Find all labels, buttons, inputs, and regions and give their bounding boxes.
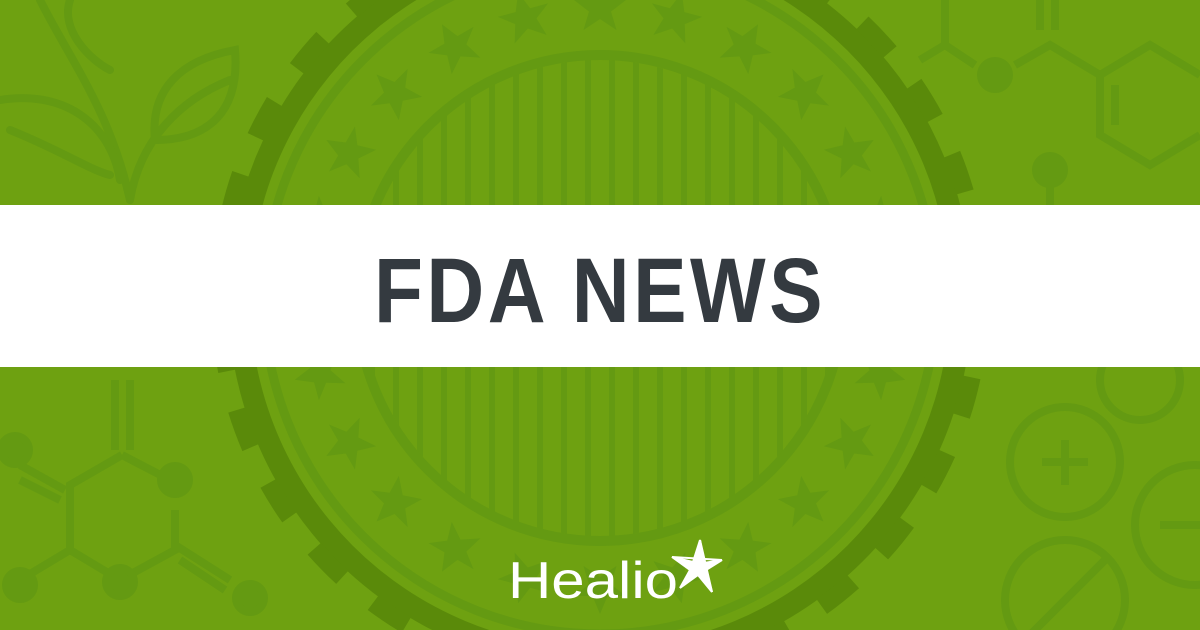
seal [220, 0, 980, 630]
decoration: leaves top-left [0, 0, 236, 200]
title band [0, 205, 1200, 367]
logo: Healio [508, 540, 722, 610]
decoration: molecule top-right [920, 0, 1200, 205]
title: FDA NEWS [374, 240, 826, 342]
decoration: molecule bottom-left [1, 380, 264, 612]
decoration: pill icons bottom-right [1005, 340, 1200, 630]
icon: star burst [672, 540, 722, 592]
logo: Healio: Healio [508, 552, 678, 610]
